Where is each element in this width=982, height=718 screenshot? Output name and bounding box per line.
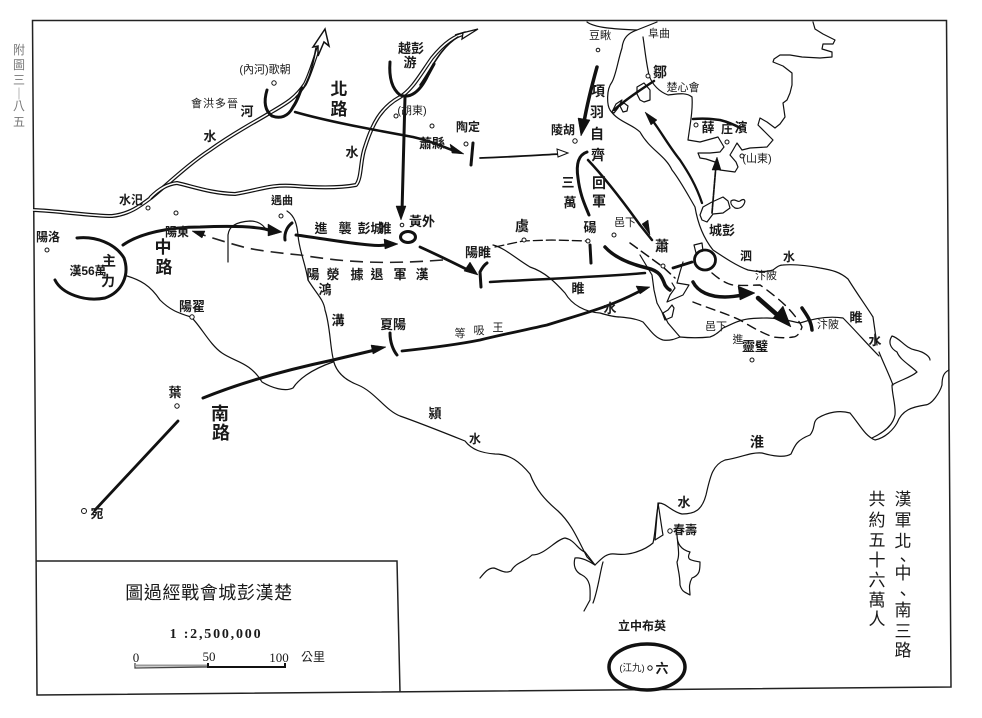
place labels east: 城彭 bbox=[709, 223, 735, 238]
main force arc around Luoyang bbox=[55, 238, 126, 299]
arrow: Pengcheng east bbox=[693, 282, 755, 300]
place labels north-west: 遇曲 bbox=[271, 193, 293, 207]
place labels east: 庄 bbox=[721, 121, 733, 136]
place labels centre: 碭 bbox=[583, 220, 597, 235]
note: five hundred sixty thousand men: 人 bbox=[868, 610, 886, 629]
place labels east: 阜曲 bbox=[648, 27, 670, 40]
callout: Ying Bu stands neutral bbox=[609, 618, 685, 690]
place labels east: 汴陂 bbox=[755, 268, 777, 282]
note: Han army three routes: 中 bbox=[894, 564, 912, 583]
page margin caption: 附 bbox=[13, 43, 25, 57]
river: Shou Chun lake bbox=[655, 503, 700, 595]
place labels centre: 淮 bbox=[750, 434, 764, 450]
place labels north-west bbox=[36, 41, 480, 521]
note: five hundred sixty thousand men: 六 bbox=[868, 571, 886, 590]
place labels north-west: 會洪多晉 bbox=[191, 96, 239, 110]
arrow: Waihuang to Suiyang bbox=[420, 247, 478, 275]
note: Han army three routes: 、 bbox=[894, 551, 912, 570]
arrow: north inner bbox=[712, 157, 721, 213]
place labels east: 濱 bbox=[734, 120, 748, 135]
annotation: Xiang Yu returns from Qi: 自 bbox=[590, 126, 604, 142]
place labels east: 鄒 bbox=[653, 64, 667, 80]
place labels north-west: 陽翟 bbox=[179, 299, 205, 314]
place labels north-west: 鴻 bbox=[318, 282, 332, 297]
label: central route: 中 bbox=[154, 238, 172, 257]
scale bar: 100 bbox=[269, 650, 289, 665]
place labels north-west: 夏陽 bbox=[380, 317, 406, 332]
arrow: Xiayang to Pengcheng bbox=[402, 286, 650, 351]
arrow: retreat dashed to Yangwu bbox=[192, 231, 443, 262]
southern route bbox=[95, 286, 650, 510]
place labels east bbox=[551, 27, 882, 354]
annotation: advance on Pengcheng: 睢 bbox=[378, 221, 392, 236]
place labels east: 汴陂 bbox=[817, 317, 839, 331]
note: five hundred sixty thousand men: 十 bbox=[868, 551, 886, 570]
callout: Ying Bu stands neutral: 六 bbox=[655, 661, 669, 676]
band near Xue bbox=[693, 119, 740, 128]
annotation: Han army retreats to Xingyang: 陽 bbox=[306, 267, 320, 282]
annotation: Xiang Yu returns from Qi: 回 bbox=[592, 175, 606, 191]
callout: Ying Bu stands neutral: 立中布英 bbox=[618, 618, 666, 633]
place labels north-west: (胡東) bbox=[397, 103, 427, 117]
river: northern tributary bbox=[643, 37, 692, 140]
place labels centre bbox=[428, 218, 764, 537]
place labels centre: 水 bbox=[469, 431, 481, 446]
annotation: advance on Pengcheng: 城 bbox=[370, 221, 384, 236]
note: Han army three routes: 三 bbox=[894, 622, 912, 641]
label: south route: 南 bbox=[211, 404, 229, 424]
place labels east: 水 bbox=[868, 333, 882, 348]
lake: northern marsh chain bbox=[612, 83, 650, 113]
river: Si River and upper channel bbox=[587, 22, 877, 345]
place labels centre: 陽睢 bbox=[465, 245, 491, 260]
troop front: Xiayang bbox=[390, 333, 397, 355]
arrow: Dingtao to Hu Ling bbox=[480, 149, 568, 158]
arrow: Ye to Xiayang bbox=[203, 345, 386, 398]
place labels north-west: 主 bbox=[102, 253, 116, 269]
river: Ji River double line bbox=[150, 33, 466, 198]
scale ratio: 1 :2,500,000 bbox=[170, 627, 262, 642]
arrow: east to Lingbi bbox=[758, 298, 791, 327]
annotation: thirty thousand: 萬 bbox=[563, 195, 577, 210]
place labels east: 陵胡 bbox=[551, 122, 575, 137]
annotation: Wang Xi and others: 等 bbox=[454, 326, 466, 340]
label: south route: 路 bbox=[212, 423, 230, 443]
scale bar: 0 bbox=[133, 650, 139, 665]
place labels north-west: 河 bbox=[240, 104, 254, 119]
note: Han army three routes: 軍 bbox=[894, 511, 912, 530]
place labels north-west: 黃外 bbox=[409, 214, 435, 229]
place labels north-west: 水汜 bbox=[119, 192, 143, 207]
annotation: Wang Xi and others: 吸 bbox=[474, 324, 484, 337]
troop front: Chaoge arc bbox=[265, 88, 302, 117]
river: lakes near Pengcheng bbox=[700, 197, 745, 222]
label: north route: 路 bbox=[330, 100, 348, 119]
scale bar: 公里 bbox=[301, 650, 325, 664]
marsh band north bbox=[614, 81, 654, 110]
annotation: Han army retreats to Xingyang: 軍 bbox=[393, 267, 407, 282]
place labels east: 邑下 bbox=[705, 320, 727, 333]
troop front: Gaopi bbox=[802, 308, 812, 330]
river: central marshes bbox=[640, 255, 689, 337]
place labels east: 進 bbox=[732, 333, 744, 346]
annotation: Han army retreats to Xingyang: 滎 bbox=[326, 267, 340, 282]
small box at Pengcheng bbox=[694, 243, 703, 253]
troop front: Quyu bbox=[285, 223, 292, 240]
river: Sui River bbox=[493, 245, 879, 356]
Pengcheng ring bbox=[694, 250, 716, 270]
troop front: Dingtao bar bbox=[471, 143, 473, 165]
page margin caption: 圖 bbox=[13, 58, 25, 72]
place labels centre: 虞 bbox=[515, 218, 529, 234]
place labels north-west: 陽洛 bbox=[36, 229, 60, 244]
place labels north-west: 水 bbox=[345, 145, 359, 160]
note: five hundred sixty thousand men: 約 bbox=[868, 511, 886, 530]
place labels north-west: 陽東 bbox=[165, 224, 189, 239]
note: five hundred sixty thousand men: 共 bbox=[868, 490, 886, 509]
annotation: Xiang Yu returns from Qi: 羽 bbox=[590, 104, 604, 120]
annotation: Xiang Yu returns from Qi: 齊 bbox=[591, 147, 605, 163]
callout: Ying Bu stands neutral: (江九) bbox=[619, 662, 645, 674]
page margin caption: 三 bbox=[13, 73, 25, 87]
place labels north-west: 游 bbox=[403, 55, 417, 70]
arrow: return to Xiao bbox=[588, 160, 652, 240]
arrow: Luoyang to Quyu bbox=[123, 224, 282, 245]
arrow: Xiang Yu south bbox=[578, 67, 597, 136]
page margin caption: 八 bbox=[13, 99, 25, 113]
arrow: exit north at Chaoge bbox=[296, 29, 329, 97]
place labels north-west: 葉 bbox=[168, 385, 182, 400]
troop front: Suiyang bbox=[480, 263, 487, 287]
place labels centre: 睢 bbox=[571, 281, 585, 296]
annotation: Han army retreats to Xingyang: 漢 bbox=[415, 267, 429, 282]
river: southern tributary and lake bbox=[480, 538, 603, 611]
northern route bbox=[265, 29, 568, 220]
note: five hundred sixty thousand men: 萬 bbox=[868, 591, 886, 610]
arrow: Peng Yue south to Waihuang bbox=[396, 97, 406, 220]
place labels east: 蕭 bbox=[655, 238, 669, 254]
dashed: Yu to Dang bbox=[495, 240, 588, 247]
place labels north-west: 漢56萬 bbox=[69, 263, 107, 278]
place labels centre: 水 bbox=[603, 301, 617, 316]
label: north route: 北 bbox=[330, 80, 348, 99]
place labels east: 泗 bbox=[740, 249, 752, 263]
place labels north-west: 越彭 bbox=[398, 41, 424, 56]
arrow: exit north-east from Peng Yue bbox=[420, 29, 478, 85]
arrow: Suiyang to Xiao bbox=[490, 273, 645, 282]
scale bar bbox=[133, 649, 325, 668]
annotation: Han army retreats to Xingyang: 退 bbox=[370, 267, 384, 282]
place labels east: 水 bbox=[783, 249, 795, 264]
thin loop arrow bbox=[228, 221, 265, 262]
place labels north-west: 溝 bbox=[331, 313, 345, 328]
page margin caption bbox=[13, 43, 25, 129]
place labels centre: 潁 bbox=[428, 406, 442, 421]
label: central route: 路 bbox=[156, 258, 172, 277]
place labels east: 豆瞅 bbox=[589, 29, 611, 42]
annotation: Xiang Yu returns from Qi: 軍 bbox=[592, 193, 606, 209]
place labels centre: 春壽 bbox=[673, 522, 697, 537]
river: Yellow River double line bbox=[33, 42, 321, 216]
note: five hundred sixty thousand men: 五 bbox=[868, 531, 886, 550]
annotation: thirty thousand: 三 bbox=[561, 175, 575, 190]
settlement markers bbox=[45, 48, 754, 533]
arrow: north to Xue bbox=[645, 112, 702, 203]
note: Han army three routes: 、 bbox=[894, 585, 912, 604]
place labels east: 楚心會 bbox=[666, 80, 700, 94]
Xiang Yu return bbox=[577, 67, 812, 338]
arrow: Quyu to Waihuang bbox=[296, 235, 398, 249]
dashed: retreat loop bbox=[693, 273, 802, 338]
central route bbox=[55, 221, 645, 299]
stub band at Pengcheng bbox=[673, 262, 692, 268]
annotation: Han army retreats to Xingyang: 據 bbox=[350, 267, 364, 282]
river: Hong Canal and Ying River bbox=[287, 211, 595, 565]
line: Wan to Ye bbox=[95, 421, 178, 510]
river: Huai River bbox=[595, 370, 949, 565]
annotation: Wang Xi and others: 王 bbox=[492, 322, 504, 334]
place labels north-west: 陶定 bbox=[456, 119, 480, 134]
troop front: Dang bar bbox=[590, 245, 591, 263]
annotation: advance on Pengcheng: 襲 bbox=[338, 221, 352, 236]
river: Huai inner branch bbox=[872, 336, 930, 438]
map title: 圖過經戰會城彭漢楚 bbox=[125, 583, 293, 603]
arrow: north route towards Dingtao bbox=[295, 112, 464, 154]
annotation: advance on Pengcheng: 進 bbox=[314, 221, 328, 236]
place labels east: 靈璧 bbox=[742, 339, 768, 354]
note: Han army three routes: 南 bbox=[894, 601, 912, 620]
river: Yang Di creek bbox=[127, 276, 333, 390]
arrow: Xiao sweep into Pengcheng bbox=[605, 247, 670, 290]
place labels north-west: 宛 bbox=[90, 506, 104, 521]
annotation: advance on Pengcheng: 彭 bbox=[357, 221, 371, 236]
troop arc: 30000 bbox=[577, 152, 589, 215]
note: Han army three routes: 路 bbox=[894, 641, 912, 660]
place labels east: 薛 bbox=[701, 120, 715, 135]
rivers bbox=[33, 22, 949, 611]
place labels centre: 水 bbox=[677, 495, 691, 510]
note: Han army three routes: 漢 bbox=[894, 490, 912, 509]
place labels east: 邑下 bbox=[614, 216, 636, 229]
Waihuang ring bbox=[400, 232, 416, 242]
place labels north-west: (內河)歌朝 bbox=[239, 62, 291, 76]
place labels north-west: 水 bbox=[203, 129, 217, 144]
troop front: Peng Yue arc bbox=[390, 62, 434, 96]
note: Han army three routes: 北 bbox=[894, 532, 912, 551]
place labels east: 睢 bbox=[849, 310, 863, 325]
river: eastern coast upper bbox=[688, 22, 835, 172]
place labels north-west: 力 bbox=[101, 273, 115, 289]
scale bar: 50 bbox=[202, 649, 216, 664]
annotation: Xiang Yu returns from Qi: 項 bbox=[591, 83, 605, 99]
legend box bbox=[36, 561, 400, 692]
route labels bbox=[154, 80, 348, 443]
page margin caption: ｜ bbox=[13, 87, 25, 101]
dashed: Xiayi scatter bbox=[630, 243, 675, 278]
place labels north-west: 蕭縣 bbox=[419, 136, 445, 151]
place labels east: (山東) bbox=[742, 152, 772, 165]
page margin caption: 五 bbox=[13, 115, 25, 129]
